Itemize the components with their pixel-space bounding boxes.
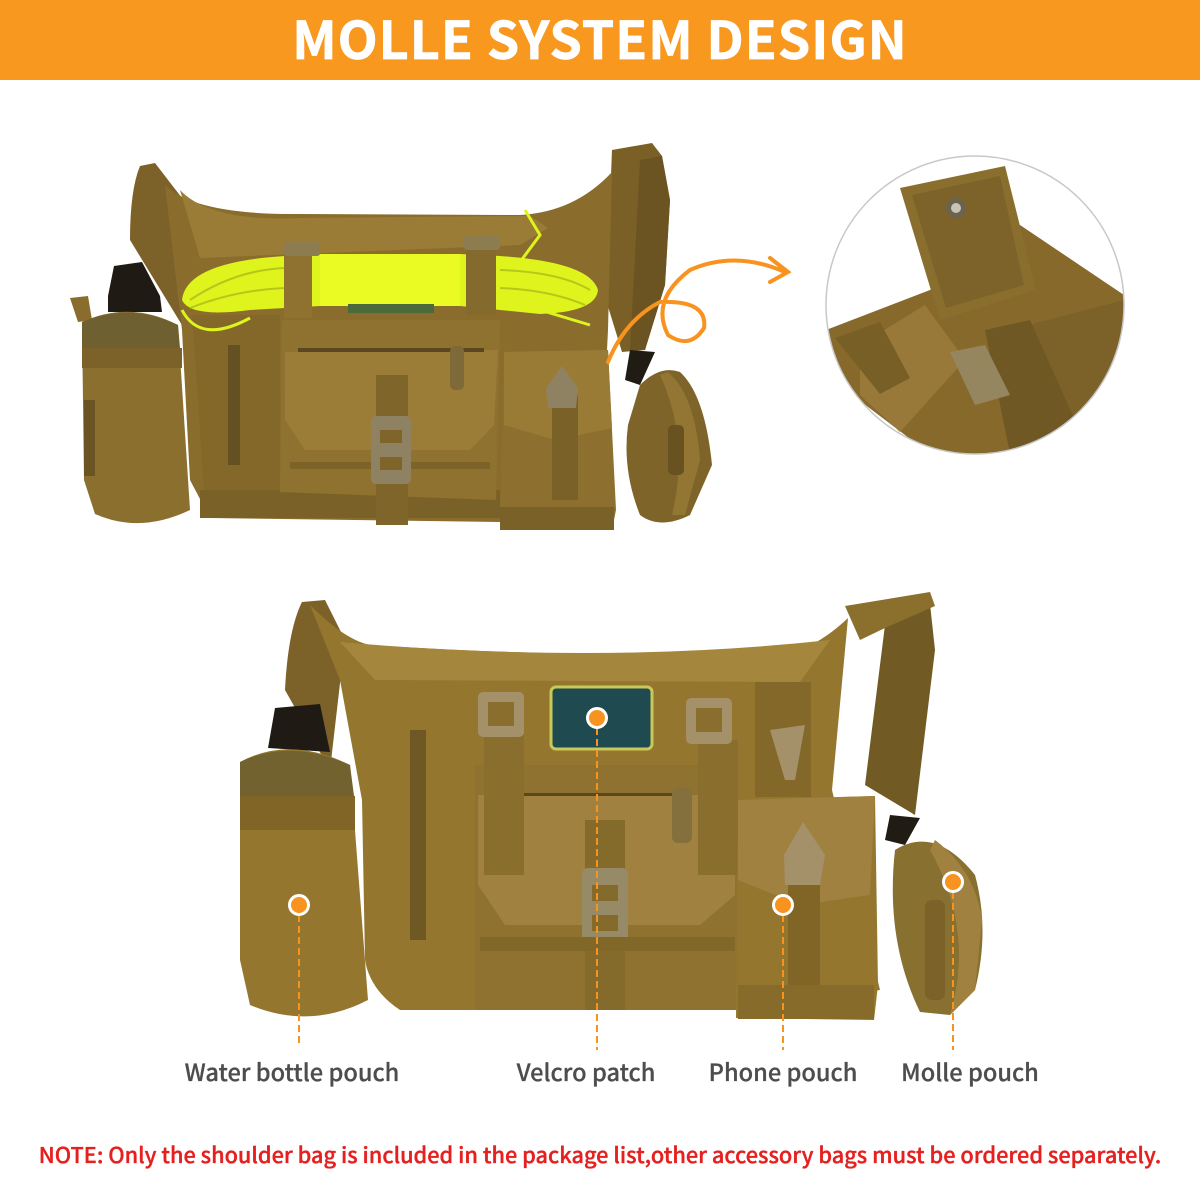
top bag illustration — [70, 143, 712, 530]
water bottle — [70, 262, 190, 523]
left strap — [130, 163, 195, 330]
side zip — [410, 730, 426, 940]
molle pouch — [885, 815, 982, 1015]
callout: velcro patch: Velcro patch — [516, 1054, 655, 1088]
note text: NOTE: Only the shoulder bag is included in the package list,other accessory bags must be ordered separately. — [39, 1139, 1161, 1170]
front pocket — [280, 320, 500, 500]
bottom bag illustration — [240, 592, 982, 1020]
yellow paracord — [182, 210, 598, 330]
web straps — [484, 735, 524, 875]
title banner — [0, 0, 1200, 80]
right strap — [865, 604, 935, 815]
callout: phone pouch — [709, 896, 857, 1088]
callout: water bottle pouch — [185, 896, 399, 1088]
left strap — [285, 600, 345, 770]
orange arrow — [608, 258, 788, 362]
velcro patch — [551, 687, 652, 749]
main body — [165, 172, 612, 522]
callout: molle pouch: Molle pouch — [901, 1054, 1039, 1088]
title banner: MOLLE SYSTEM DESIGN — [292, 0, 908, 74]
bag body — [310, 605, 880, 1010]
side zip — [228, 345, 240, 465]
front pocket — [475, 765, 740, 1010]
callout: water bottle pouch: Water bottle pouch — [185, 1054, 399, 1088]
water bottle — [240, 704, 368, 1016]
detail circle — [826, 156, 1124, 454]
callout: molle pouch — [901, 872, 1039, 1088]
callout: velcro patch — [516, 708, 655, 1088]
callout: phone pouch: Phone pouch — [709, 1054, 857, 1088]
molle pouch — [625, 350, 712, 522]
webbing straps over cord — [284, 250, 312, 318]
right strap — [606, 143, 670, 352]
phone pouch — [500, 350, 616, 530]
phone pouch — [736, 796, 878, 1020]
